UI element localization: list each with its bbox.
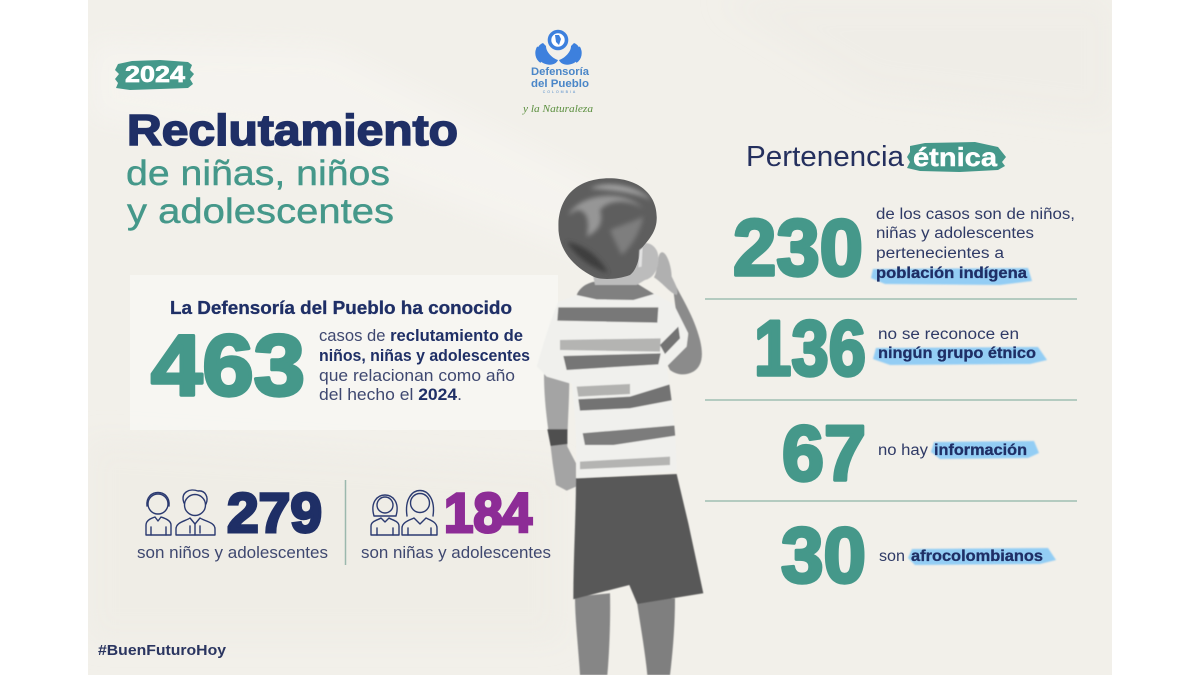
stat row: 67: información — [934, 442, 1027, 459]
panel description: niños, niñas y adolescentes — [319, 347, 530, 365]
left arm and hand — [544, 373, 576, 491]
heading: Pertenencia étnica: Pertenencia — [746, 141, 905, 173]
stat row: 136: ningún grupo étnico — [878, 345, 1036, 362]
stat row: 136: no se reconoce en — [878, 326, 1019, 343]
logo: Defensoría del Pueblo: Defensoría — [531, 66, 590, 78]
stat row: 230: niñas y adolescentes — [876, 225, 1034, 242]
stat: 279 niños: 279 — [227, 481, 322, 544]
ear — [638, 247, 643, 267]
icon: two girls — [371, 490, 437, 535]
stat row: 136 — [754, 304, 1047, 392]
title: de niñas, niños — [126, 154, 390, 193]
panel description — [319, 327, 530, 404]
face and neck — [593, 243, 658, 285]
stat row: 30: afrocolombianos — [911, 548, 1043, 565]
big number 463: 463 — [151, 318, 305, 414]
icon: two boys — [146, 490, 215, 535]
highlight: afrocolombianos — [908, 548, 1056, 565]
stat: 184 niñas: son niñas y adolescentes — [361, 544, 551, 562]
badge: 2024 — [115, 60, 194, 90]
panel: 463 casos — [130, 275, 558, 430]
badge: 2024: 2024 — [125, 61, 185, 87]
logo: Defensoría del Pueblo: y la Naturaleza — [522, 103, 594, 115]
shorts — [573, 474, 703, 604]
stat row: 230: población indígena — [876, 265, 1027, 282]
title: Reclutamiento — [127, 106, 458, 155]
logo: Defensoría del Pueblo: del Pueblo — [531, 78, 589, 90]
logo: Defensoría del Pueblo: COLOMBIA — [543, 90, 577, 94]
right arm and hand — [665, 277, 702, 374]
stat: 279 niños: son niños y adolescentes — [137, 544, 328, 562]
highlight: información — [931, 441, 1039, 459]
logo: Defensoría del Pueblo — [522, 32, 594, 115]
stat row: 67 — [782, 409, 1039, 497]
stat row: 67: 67 — [782, 409, 866, 497]
stat row: 230 — [733, 203, 1075, 292]
stat row: 30: son — [879, 548, 905, 565]
panel description: del hecho el 2024. — [319, 386, 462, 404]
stat: 184 niñas: 184 — [444, 481, 532, 544]
stat row: 30 — [781, 511, 1056, 599]
stat row: 136: 136 — [754, 304, 866, 392]
hair — [558, 178, 657, 279]
heading: Pertenencia étnica: étnica — [913, 142, 998, 172]
stat row: 67: no hay — [878, 442, 928, 459]
stat row: 30: 30 — [781, 511, 866, 599]
stat: 279 niños — [137, 481, 328, 562]
stat row: 230: de los casos son de niños, — [876, 206, 1075, 223]
legs — [575, 593, 610, 675]
highlight: población indígena — [871, 268, 1032, 285]
highlight: ningún grupo étnico — [873, 347, 1047, 365]
divider — [344, 480, 346, 565]
panel heading: La Defensoría del Pueblo ha conocido — [170, 297, 512, 318]
hashtag: #BuenFuturoHoy — [98, 643, 226, 659]
panel description: que relacionan como año — [319, 367, 515, 385]
icon: blue hands holding circle — [536, 32, 581, 65]
stat row: 230: 230 — [733, 203, 863, 292]
brush highlight — [907, 142, 1006, 172]
photo: boy seen from behind — [530, 173, 703, 675]
stat row: 230: pertenecientes a — [876, 245, 1004, 262]
heading: Pertenencia étnica — [746, 141, 1006, 173]
striped shirt — [544, 294, 689, 479]
stat: 184 niñas — [361, 481, 551, 562]
panel description: casos de reclutamiento de — [319, 327, 523, 345]
collar — [577, 282, 654, 300]
title: y adolescentes — [127, 192, 394, 231]
title — [126, 106, 458, 231]
